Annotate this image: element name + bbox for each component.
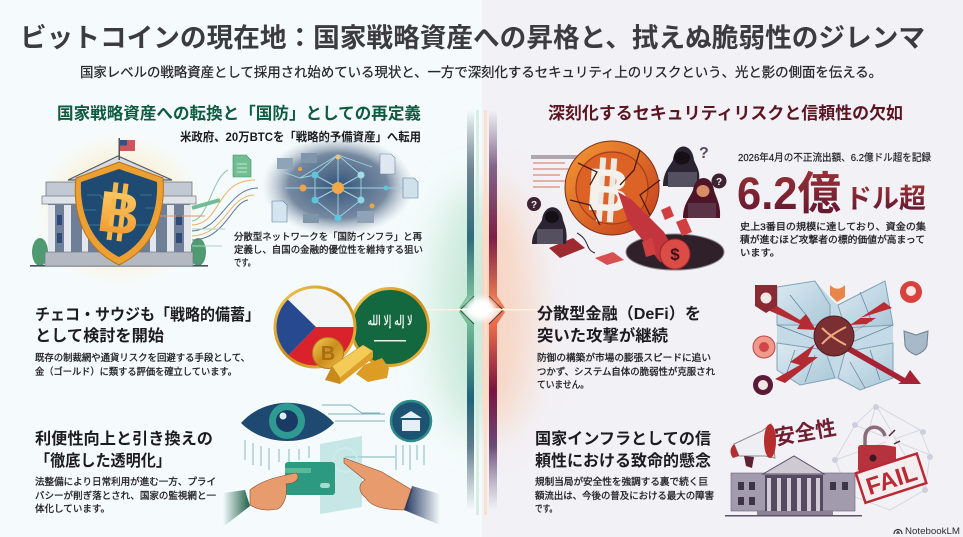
body text: transparency: バシーが削ぎ落とされ、国家の監視網と一 bbox=[35, 490, 216, 502]
body text: transparency: 体化しています。 bbox=[35, 503, 110, 515]
heading: DeFi bbox=[537, 304, 701, 345]
hacker lower left: ? bbox=[531, 200, 537, 211]
heading: transparency: 「徹底した透明化」 bbox=[35, 452, 171, 470]
body text: reserves bbox=[35, 352, 250, 378]
icon: Czech and Saudi flag rings with gold: لا إله إلا الله bbox=[368, 314, 412, 329]
big stat: ドル超 bbox=[845, 184, 926, 214]
body text: DeFi: 防御の構築が市場の膨張スピードに追い bbox=[537, 352, 711, 364]
orange glow near the divider bbox=[482, 174, 551, 446]
flow lines into network bbox=[160, 170, 258, 246]
background: lavender right half bbox=[482, 0, 963, 537]
big stat bbox=[737, 168, 926, 219]
heading: transparency: 利便性向上と引き換えの bbox=[35, 429, 213, 448]
heading: DeFi: 突いた攻撃が継続 bbox=[537, 326, 668, 345]
green glow near the divider bbox=[416, 176, 482, 444]
broken padlock bbox=[858, 427, 900, 472]
right heading: 深刻化するセキュリティリスクと信頼性の欠如 bbox=[548, 103, 903, 123]
FAIL stamp bbox=[856, 454, 926, 503]
icon: Czech and Saudi flag rings with gold bbox=[275, 287, 428, 384]
body text: DeFi: ていません。 bbox=[537, 380, 589, 391]
hacker top bbox=[663, 145, 709, 187]
icon: cracked bitcoin, hackers and drain: B bbox=[584, 156, 632, 225]
body text: transparency bbox=[35, 476, 216, 515]
US subheading: 米政府、20万BTCを「戦略的予備資産」へ転用 bbox=[180, 129, 421, 144]
body text: stat: 積が進むほど攻撃者の標的価値が高まって bbox=[740, 234, 925, 246]
left heading: 国家戦略資産への転換と「国防」としての再定義 bbox=[57, 103, 421, 123]
logo: NotebookLM: NotebookLM bbox=[905, 526, 960, 537]
heading: Czech and Saudi: チェコ・サウジも「戦略的備蓄」 bbox=[35, 305, 260, 324]
body text: infrastructure bbox=[535, 476, 714, 515]
body text: infrastructure: 額流出は、今後の普及における最大の障害 bbox=[535, 490, 714, 502]
heading: Czech and Saudi: として検討を開始 bbox=[35, 326, 164, 345]
heading: national infrastructure: 国家インフラとしての信 bbox=[535, 429, 711, 448]
hacker middle bbox=[683, 174, 726, 218]
stat caption: 2026年4月の不正流出額、6.2億ドル超を記録 bbox=[738, 151, 931, 164]
icon: cracked bitcoin, hackers and drain bbox=[527, 141, 726, 270]
body text: transparency: 法整備により日常利用が進む一方、プライ bbox=[35, 476, 216, 488]
heading: national infrastructure bbox=[535, 429, 711, 470]
heading: transparency bbox=[35, 429, 213, 470]
body text: network: 分散型ネットワークを「国防インフラ」と再 bbox=[234, 231, 422, 243]
body text: network bbox=[234, 231, 423, 269]
heading: Czech and Saudi bbox=[35, 305, 260, 345]
title: ビットコインの現在地：国家戦略資産への昇格と、拭えぬ脆弱性のジレンマ bbox=[20, 23, 925, 53]
body text: DeFi: つかず、システム自体の脆弱性が克服され bbox=[537, 366, 715, 378]
body text: DeFi bbox=[537, 352, 715, 391]
heading: DeFi: 分散型金融（DeFi）を bbox=[537, 304, 701, 323]
icon: cracked bitcoin, hackers and drain: $ bbox=[670, 245, 680, 264]
body text: reserves: 既存の制裁網や通貨リスクを回避する手段として、 bbox=[35, 352, 250, 364]
body text: reserves: 金（ゴールド）に類する評価を確立しています。 bbox=[35, 366, 237, 378]
central divider bbox=[425, 110, 537, 515]
background: light left half bbox=[0, 0, 482, 537]
icon: Czech and Saudi flag rings with gold: B bbox=[321, 343, 335, 365]
body text: stat bbox=[740, 221, 927, 259]
panel: left column bbox=[30, 103, 440, 527]
big stat: 6.2億 bbox=[737, 168, 841, 219]
body text: stat: 史上3番目の規模に達しており、資金の集 bbox=[740, 221, 927, 233]
body text: network: 定義し、自国の金融的優位性を維持する狙い bbox=[234, 244, 423, 256]
subtitle: 国家レベルの戦略資産として採用され始めている現状と、一方で深刻化するセキュリティ上のリスクという、光と影の側面を伝える。 bbox=[80, 65, 882, 80]
FAIL stamp: FAIL bbox=[863, 459, 921, 501]
bitcoin symbol on shield: B bbox=[94, 179, 144, 248]
icon: failed security at government building bbox=[725, 404, 933, 516]
icon: decentralised network bbox=[262, 136, 418, 236]
icon: shattered glass and attacks bbox=[753, 281, 928, 395]
body text: infrastructure: です。 bbox=[535, 504, 557, 515]
hacker middle: ? bbox=[716, 177, 722, 188]
icon: surveillance eye, card and hands bbox=[223, 401, 440, 527]
megaphone bbox=[730, 424, 776, 468]
hacker top: ? bbox=[699, 145, 709, 162]
body text: stat: います。 bbox=[740, 248, 780, 259]
icon: bank with bitcoin shield bbox=[30, 130, 208, 290]
heading: national infrastructure: 頼性における致命的懸念 bbox=[535, 451, 711, 470]
body text: infrastructure: 規制当局が安全性を強調する裏で続く巨 bbox=[535, 476, 708, 488]
icon: document green bbox=[233, 155, 251, 177]
panel: right column bbox=[527, 103, 933, 516]
stamp word safety: 安全性 bbox=[773, 417, 838, 450]
body text: network: です。 bbox=[234, 258, 255, 269]
hacker lower left bbox=[527, 197, 567, 244]
